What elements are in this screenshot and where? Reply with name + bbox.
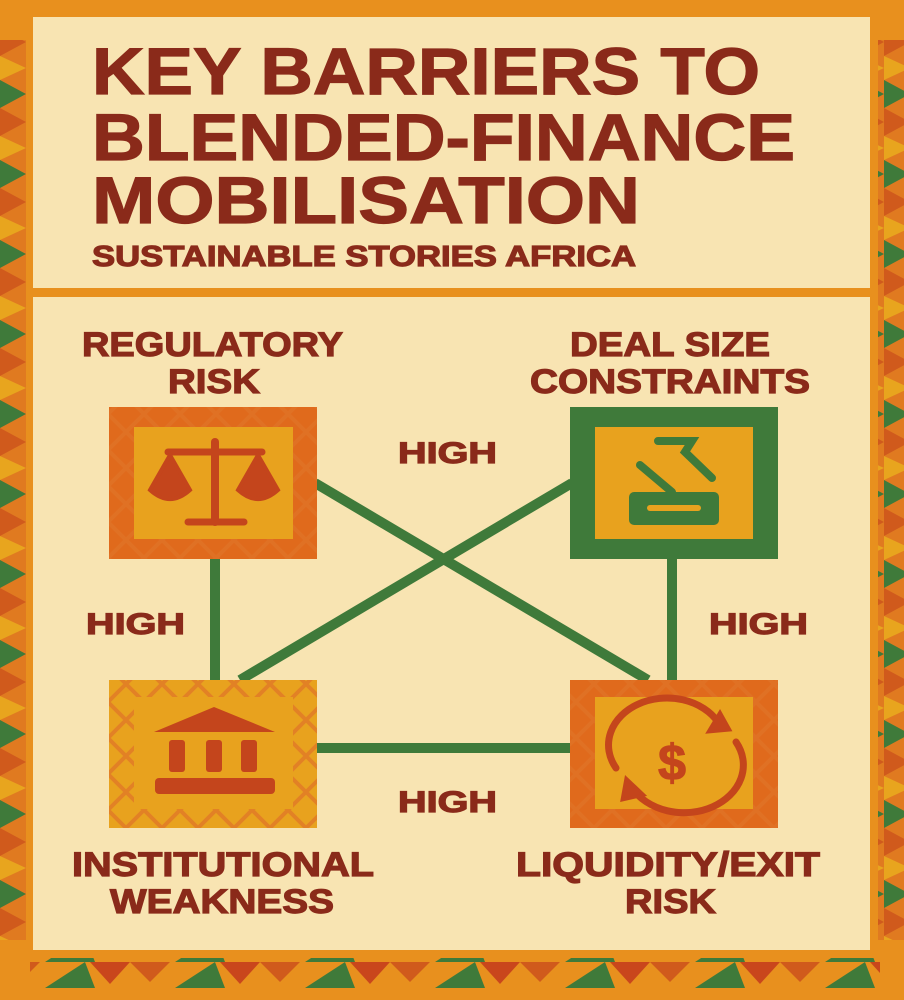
- icon: bank: [154, 707, 275, 794]
- node: liquidity: RISK: [625, 883, 716, 921]
- icon: dollar cycle: [609, 698, 743, 813]
- node: institutional weakness: WEAKNESS: [110, 883, 334, 921]
- title: MOBILISATION: [92, 163, 640, 237]
- node: liquidity: [516, 680, 820, 921]
- connecting lines: [215, 483, 672, 748]
- labels HIGH: HIGH: [709, 608, 808, 641]
- node: regulatory risk: REGULATORY: [82, 326, 343, 364]
- node: deal size: CONSTRAINTS: [530, 363, 810, 401]
- node: regulatory risk: [82, 326, 343, 559]
- node: deal size: [530, 326, 810, 559]
- node: liquidity: LIQUIDITY/EXIT: [516, 846, 820, 884]
- icon: gavel: [629, 441, 719, 525]
- node: deal size: DEAL SIZE: [570, 326, 770, 364]
- labels HIGH: HIGH: [86, 608, 185, 641]
- title: BLENDED-FINANCE: [92, 100, 795, 174]
- labels HIGH: HIGH: [398, 786, 497, 819]
- header panel: [33, 17, 870, 288]
- labels HIGH: HIGH: [398, 437, 497, 470]
- subtitle: SUSTAINABLE STORIES AFRICA: [92, 241, 636, 273]
- title: KEY BARRIERS TO: [92, 34, 760, 108]
- labels HIGH: [86, 437, 808, 819]
- node: liquidity: $: [658, 735, 686, 791]
- icon: scales: [150, 442, 278, 522]
- main panel: [33, 297, 870, 950]
- node: institutional weakness: [72, 680, 374, 921]
- title: [92, 34, 795, 237]
- node: regulatory risk: RISK: [168, 363, 261, 401]
- node: institutional weakness: INSTITUTIONAL: [72, 846, 374, 884]
